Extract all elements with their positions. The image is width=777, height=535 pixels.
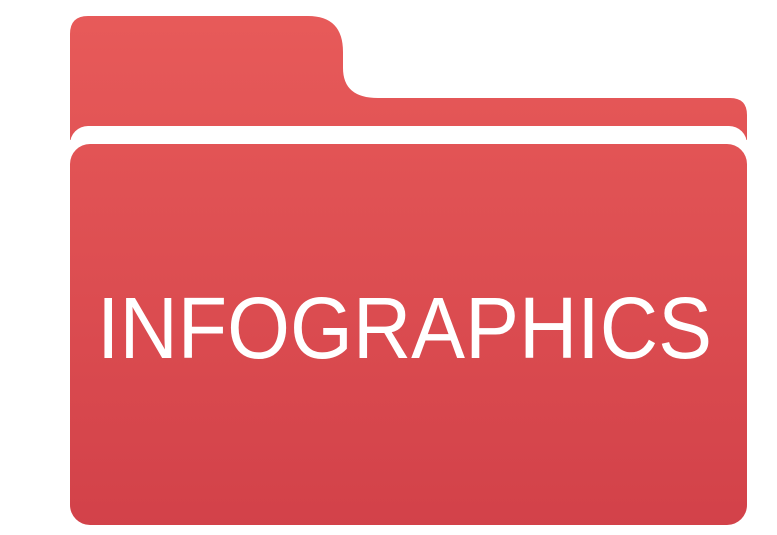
folder front panel	[70, 144, 747, 525]
folder back with tab	[70, 16, 747, 140]
title: INFOGRAPHICS	[97, 280, 712, 377]
white strip	[70, 126, 747, 166]
